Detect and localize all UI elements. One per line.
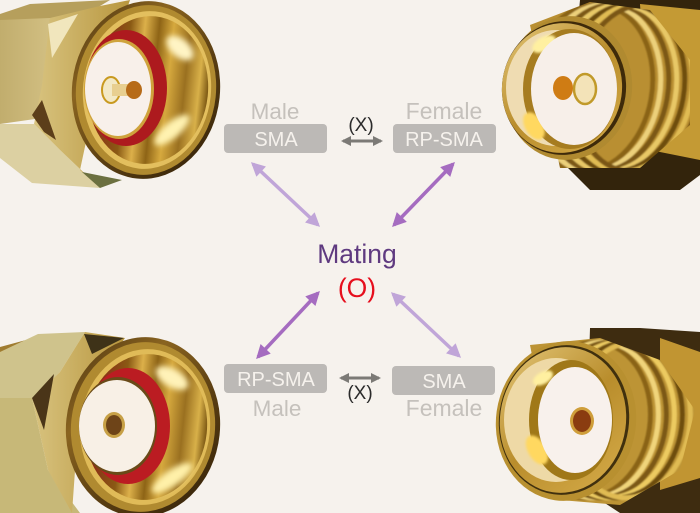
center label: Mating (O): Mating: [317, 239, 397, 269]
arrow: RP-SMA male to mating: [258, 293, 318, 357]
top no-mating marker: [343, 115, 381, 141]
photo: SMA female connector, bottom right: [486, 328, 700, 513]
top row labels: SMA male: [224, 99, 327, 153]
top no-mating marker: (X): [348, 115, 374, 136]
bottom row labels: RP-SMA male: RP-SMA: [237, 369, 316, 391]
arrow: SMA male to mating: [253, 164, 318, 225]
bottom row labels: RP-SMA male: Male: [253, 396, 301, 421]
bottom no-mating marker: [341, 378, 379, 404]
bottom row labels: SMA female: [392, 366, 495, 421]
center label: Mating (O): (O): [338, 273, 376, 303]
photo: SMA male connector, top left: [0, 0, 229, 188]
center label: Mating (O): [317, 239, 397, 303]
top row labels: SMA male: SMA: [254, 129, 298, 151]
top row labels: RP-SMA female: Female: [406, 98, 482, 124]
arrow: SMA female to mating: [393, 294, 459, 356]
photo: RP-SMA female connector, top right: [493, 0, 700, 190]
top row labels: RP-SMA female: RP-SMA: [405, 129, 484, 151]
arrow: RP-SMA female to mating: [394, 164, 453, 225]
bottom row labels: RP-SMA male: [224, 364, 327, 421]
bottom no-mating marker: (X): [347, 383, 373, 404]
bottom row labels: SMA female: Female: [406, 395, 482, 421]
bottom row labels: SMA female: SMA: [422, 371, 466, 393]
top row labels: SMA male: Male: [251, 99, 299, 124]
photo: RP-SMA male connector, bottom left: [0, 329, 229, 513]
top row labels: RP-SMA female: [393, 98, 496, 153]
